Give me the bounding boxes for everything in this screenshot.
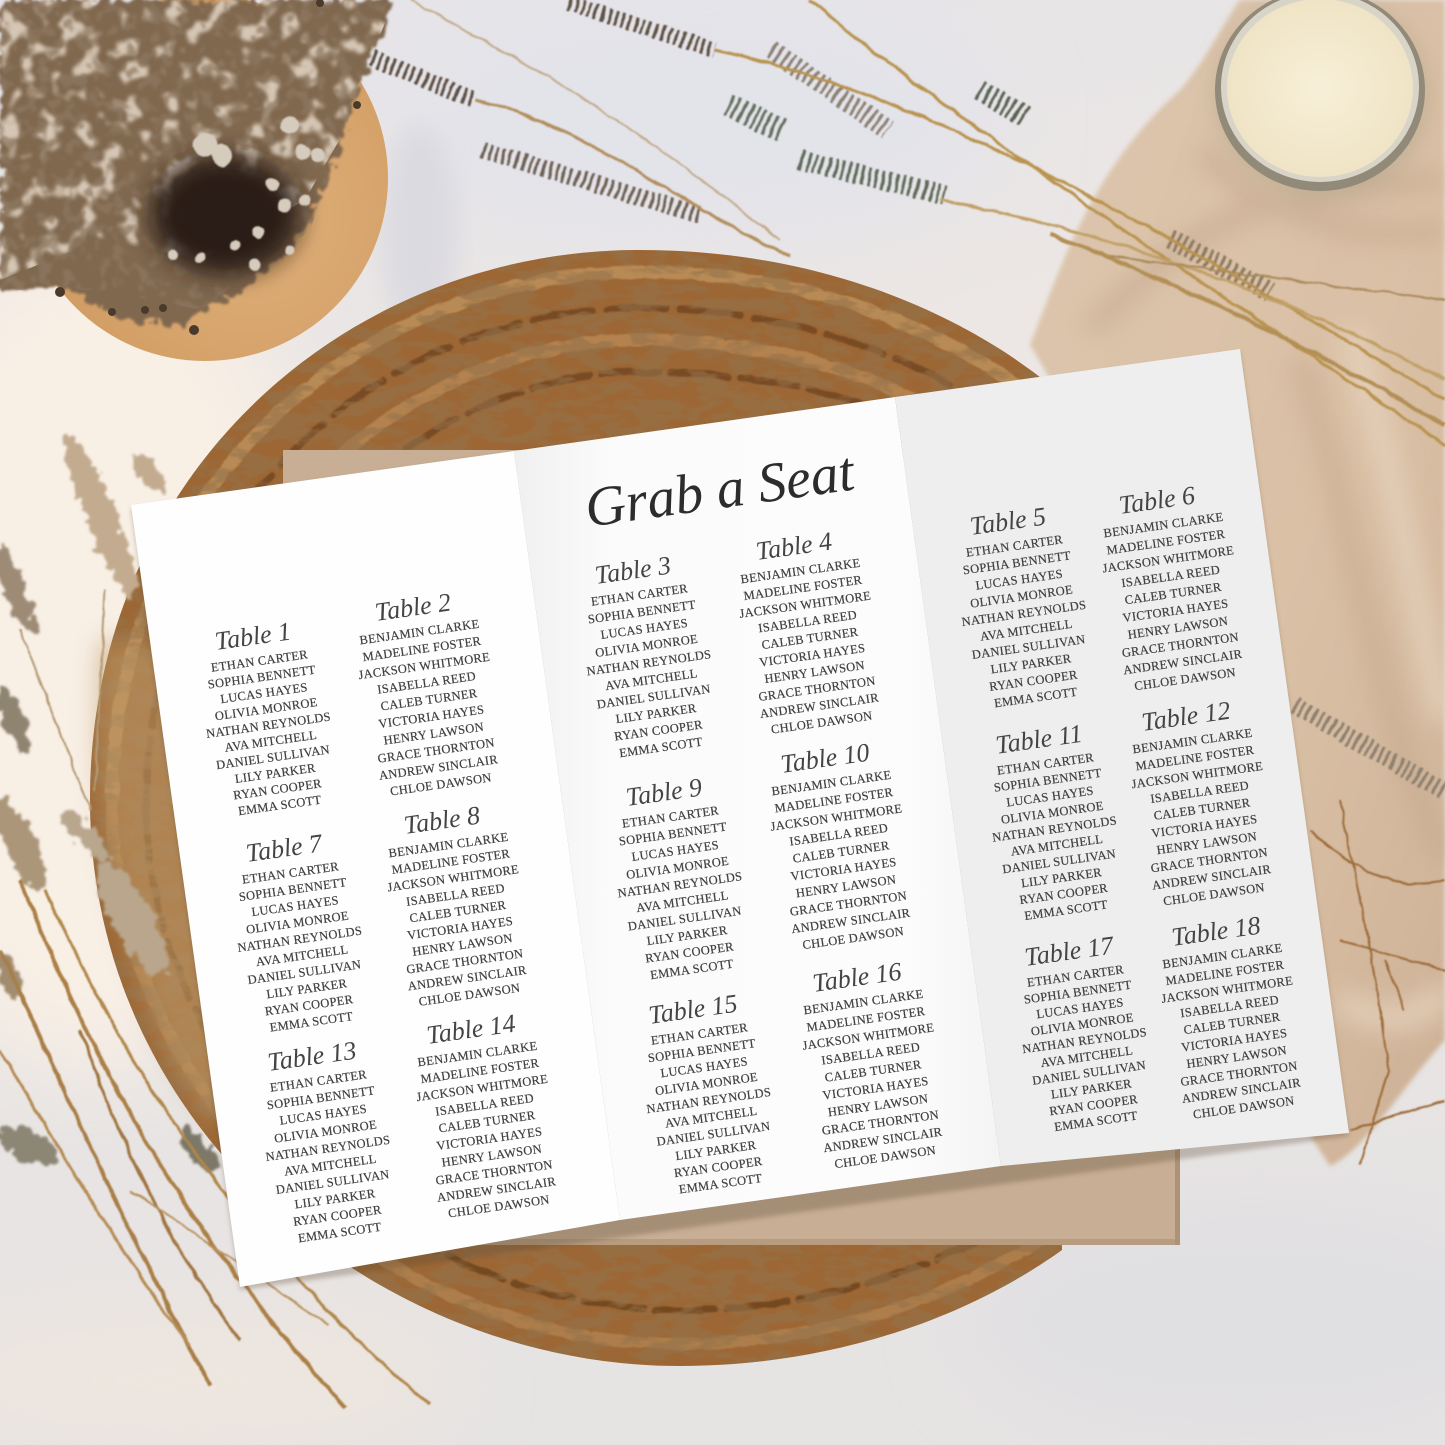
table 8 <box>377 796 536 1011</box>
table 11: OLIVIA MONROE <box>1000 799 1105 827</box>
table 15: LUCAS HAYES <box>660 1054 749 1080</box>
table 15: SOPHIA BENNETT <box>647 1036 757 1065</box>
table 1: OLIVIA MONROE <box>214 695 319 723</box>
table 4: ANDREW SINCLAIR <box>759 690 880 721</box>
table 5: ETHAN CARTER <box>965 532 1064 560</box>
table 8: MADELINE FOSTER <box>391 846 511 877</box>
table 9: ETHAN CARTER <box>621 803 720 831</box>
table 11 <box>978 716 1129 926</box>
table 13: DANIEL SULLIVAN <box>275 1167 390 1197</box>
table 10: CHLOE DAWSON <box>802 924 905 952</box>
table 7: RYAN COOPER <box>264 992 354 1018</box>
table 18: JACKSON WHITMORE <box>1160 974 1294 1006</box>
table 17: ETHAN CARTER <box>1026 962 1125 990</box>
table 6: ANDREW SINCLAIR <box>1122 647 1243 677</box>
table 8: GRACE THORNTON <box>405 946 524 977</box>
table 7: AVA MITCHELL <box>255 942 349 969</box>
table 1: EMMA SCOTT <box>237 793 322 818</box>
table 5: Table 5 <box>968 502 1048 541</box>
table 2: Table 2 <box>373 588 453 627</box>
table 3: RYAN COOPER <box>613 717 704 744</box>
table 15: Table 15 <box>647 989 739 1030</box>
table 4: Table 4 <box>754 527 834 566</box>
table 1 <box>192 613 343 821</box>
panel: left fold <box>131 451 620 1287</box>
table 16: BENJAMIN CLARKE <box>803 987 924 1017</box>
table 3 <box>572 547 724 763</box>
wheat stems top <box>372 0 1445 792</box>
table 2: ISABELLA REED <box>376 669 477 697</box>
table 2: JACKSON WHITMORE <box>358 650 491 682</box>
table 5: SOPHIA BENNETT <box>962 548 1072 577</box>
table 11: LUCAS HAYES <box>1005 783 1095 810</box>
table 7: DANIEL SULLIVAN <box>247 957 362 987</box>
table 5: EMMA SCOTT <box>993 685 1078 710</box>
table 10 <box>760 734 920 954</box>
table 2 <box>348 583 508 801</box>
table 13: Table 13 <box>266 1036 358 1077</box>
table 6: HENRY LAWSON <box>1127 614 1229 642</box>
table 1: ETHAN CARTER <box>210 647 309 675</box>
table 17: Table 17 <box>1023 930 1116 972</box>
table 18: MADELINE FOSTER <box>1165 958 1285 988</box>
table 14: CALEB TURNER <box>438 1108 537 1135</box>
table 6: VICTORIA HAYES <box>1122 596 1229 625</box>
wheat stems left <box>0 428 430 1408</box>
table 6: Table 6 <box>1117 481 1197 520</box>
table 5: OLIVIA MONROE <box>969 582 1074 611</box>
fabric napkin <box>1030 0 1445 1166</box>
table 14: MADELINE FOSTER <box>420 1056 540 1086</box>
table 1: LUCAS HAYES <box>219 680 308 706</box>
table 16: HENRY LAWSON <box>827 1091 929 1119</box>
table 18 <box>1151 907 1310 1124</box>
fluffy seed heads <box>0 428 225 1177</box>
table 10: ANDREW SINCLAIR <box>790 906 912 936</box>
table 13: ETHAN CARTER <box>269 1067 368 1095</box>
table 5: AVA MITCHELL <box>979 617 1073 644</box>
table 18: Table 18 <box>1170 911 1262 952</box>
table 7: Table 7 <box>244 828 325 868</box>
table 12: GRACE THORNTON <box>1150 845 1269 875</box>
table 4: CALEB TURNER <box>761 625 859 652</box>
table 11: AVA MITCHELL <box>1010 832 1104 859</box>
table 17: LUCAS HAYES <box>1035 995 1124 1021</box>
table 8: HENRY LAWSON <box>411 931 514 959</box>
table 17 <box>1008 928 1159 1137</box>
table 7: ETHAN CARTER <box>241 859 340 887</box>
table 14: Table 14 <box>425 1009 517 1050</box>
table 3: OLIVIA MONROE <box>594 632 699 660</box>
table 9: RYAN COOPER <box>644 939 735 966</box>
table 11: EMMA SCOTT <box>1023 897 1109 923</box>
table 5: NATHAN REYNOLDS <box>961 598 1087 629</box>
table 7 <box>223 825 375 1038</box>
table 16: GRACE THORNTON <box>821 1108 940 1138</box>
table 17: SOPHIA BENNETT <box>1023 978 1133 1007</box>
table 15: OLIVIA MONROE <box>654 1070 759 1098</box>
table 8: CALEB TURNER <box>409 898 507 925</box>
table 11: NATHAN REYNOLDS <box>991 813 1118 845</box>
table 3: EMMA SCOTT <box>618 735 703 760</box>
table 4: ISABELLA REED <box>757 608 858 635</box>
table 9 <box>603 769 755 985</box>
table 5: RYAN COOPER <box>988 668 1079 694</box>
table 7: EMMA SCOTT <box>269 1009 354 1035</box>
table 16: CHLOE DAWSON <box>834 1143 937 1171</box>
woven placemat <box>90 250 1062 1366</box>
table 6: ISABELLA REED <box>1120 563 1221 590</box>
table 12: MADELINE FOSTER <box>1135 743 1255 773</box>
table 9: DANIEL SULLIVAN <box>627 904 742 934</box>
table 4: VICTORIA HAYES <box>758 641 866 670</box>
table 1: RYAN COOPER <box>232 776 323 803</box>
panel: centre fold <box>514 397 1001 1220</box>
table 14: BENJAMIN CLARKE <box>417 1039 538 1069</box>
table 8: BENJAMIN CLARKE <box>388 830 509 860</box>
table 12: ISABELLA REED <box>1149 778 1250 806</box>
table 10: Table 10 <box>779 738 871 779</box>
table 11: SOPHIA BENNETT <box>993 766 1103 795</box>
table 5 <box>947 498 1099 713</box>
table 12: Table 12 <box>1140 696 1232 737</box>
twigs right <box>1310 800 1445 1165</box>
table 2: ANDREW SINCLAIR <box>378 752 499 783</box>
table 18: BENJAMIN CLARKE <box>1162 941 1283 971</box>
table 18: VICTORIA HAYES <box>1180 1026 1288 1055</box>
table 10: GRACE THORNTON <box>789 889 908 919</box>
dried flower bouquet <box>0 0 395 335</box>
table 6: MADELINE FOSTER <box>1106 527 1226 557</box>
table 1: AVA MITCHELL <box>224 728 318 755</box>
table 6: CALEB TURNER <box>1124 580 1223 607</box>
table 3: DANIEL SULLIVAN <box>596 682 711 712</box>
table 16: ANDREW SINCLAIR <box>822 1125 944 1155</box>
table 15: DANIEL SULLIVAN <box>656 1119 771 1149</box>
table 8: ISABELLA REED <box>405 881 506 909</box>
table 18: CHLOE DAWSON <box>1192 1094 1295 1122</box>
table 8: JACKSON WHITMORE <box>386 862 520 894</box>
table 10: BENJAMIN CLARKE <box>771 768 892 798</box>
table 13: RYAN COOPER <box>292 1203 383 1229</box>
table 1: SOPHIA BENNETT <box>207 663 317 692</box>
table 15 <box>632 986 784 1199</box>
table 6: BENJAMIN CLARKE <box>1103 510 1224 540</box>
table 3: Table 3 <box>593 551 673 590</box>
table 2: CALEB TURNER <box>380 686 479 713</box>
panel: right fold <box>895 349 1349 1166</box>
table 12: ANDREW SINCLAIR <box>1151 862 1272 893</box>
table 10: JACKSON WHITMORE <box>770 801 903 834</box>
table 7: OLIVIA MONROE <box>245 909 350 937</box>
table 13: EMMA SCOTT <box>297 1220 382 1245</box>
paper shadow <box>131 352 1349 1290</box>
table 15: NATHAN REYNOLDS <box>646 1085 772 1116</box>
table 8: ANDREW SINCLAIR <box>407 963 528 993</box>
table 10: CALEB TURNER <box>792 838 891 866</box>
table 14: JACKSON WHITMORE <box>416 1072 549 1104</box>
table 14: VICTORIA HAYES <box>436 1124 543 1153</box>
table 11: RYAN COOPER <box>1019 881 1109 907</box>
table 13: NATHAN REYNOLDS <box>265 1133 391 1164</box>
table 18: CALEB TURNER <box>1183 1010 1281 1037</box>
table 10: ISABELLA REED <box>789 821 889 849</box>
table 16: Table 16 <box>811 957 903 998</box>
table 18: HENRY LAWSON <box>1186 1043 1288 1071</box>
table 14: CHLOE DAWSON <box>447 1192 550 1220</box>
table 2: HENRY LAWSON <box>383 720 485 748</box>
seating chart paper <box>131 349 1349 1287</box>
table 9: Table 9 <box>624 773 704 812</box>
table 4: MADELINE FOSTER <box>743 573 863 603</box>
table 2: BENJAMIN CLARKE <box>359 617 480 647</box>
table 3: AVA MITCHELL <box>604 666 698 693</box>
table 4 <box>729 522 888 739</box>
table 13: AVA MITCHELL <box>283 1152 377 1179</box>
table 2: VICTORIA HAYES <box>378 702 485 731</box>
table 2: GRACE THORNTON <box>377 735 495 766</box>
table 16: ISABELLA REED <box>821 1040 921 1068</box>
table 7: LUCAS HAYES <box>251 893 340 919</box>
candle jar <box>1215 0 1428 196</box>
table 14 <box>406 1005 566 1223</box>
table 4: JACKSON WHITMORE <box>738 589 872 621</box>
table 15: RYAN COOPER <box>673 1154 764 1180</box>
table 15: AVA MITCHELL <box>664 1104 758 1131</box>
table 4: BENJAMIN CLARKE <box>740 556 861 586</box>
table 5: LILY PARKER <box>990 651 1073 676</box>
table 10: HENRY LAWSON <box>795 872 897 900</box>
table 14: HENRY LAWSON <box>441 1142 543 1170</box>
table 11: ETHAN CARTER <box>996 750 1095 778</box>
table 6: JACKSON WHITMORE <box>1102 543 1235 575</box>
table 15: ETHAN CARTER <box>650 1020 749 1048</box>
vase <box>22 0 388 361</box>
table 6 <box>1092 476 1252 695</box>
table 17: DANIEL SULLIVAN <box>1031 1058 1147 1088</box>
table 1: NATHAN REYNOLDS <box>205 710 332 741</box>
table 13: LUCAS HAYES <box>279 1102 368 1128</box>
table 1: Table 1 <box>213 617 293 656</box>
book under the seating chart <box>283 450 1180 1245</box>
table 9: EMMA SCOTT <box>649 957 734 982</box>
table 17: RYAN COOPER <box>1049 1092 1139 1118</box>
table 13 <box>251 1033 403 1248</box>
table 14: GRACE THORNTON <box>435 1157 553 1188</box>
table 16 <box>792 953 952 1173</box>
table 9: NATHAN REYNOLDS <box>617 869 743 900</box>
table 3: ETHAN CARTER <box>590 581 689 609</box>
table 7: NATHAN REYNOLDS <box>237 924 363 955</box>
table 1: LILY PARKER <box>234 761 317 786</box>
table 18: ISABELLA REED <box>1179 993 1280 1020</box>
table 13: LILY PARKER <box>294 1186 377 1211</box>
table 14: ISABELLA REED <box>434 1091 535 1119</box>
table 12: BENJAMIN CLARKE <box>1132 726 1253 756</box>
table 8: VICTORIA HAYES <box>406 914 514 943</box>
table 11: LILY PARKER <box>1020 865 1103 890</box>
table 8: CHLOE DAWSON <box>418 981 521 1009</box>
table 12: JACKSON WHITMORE <box>1131 759 1264 791</box>
table 4: GRACE THORNTON <box>758 674 876 704</box>
table 16: JACKSON WHITMORE <box>802 1020 935 1053</box>
table 14: ANDREW SINCLAIR <box>436 1174 557 1205</box>
table 17: EMMA SCOTT <box>1053 1109 1138 1134</box>
table 17: NATHAN REYNOLDS <box>1021 1025 1148 1056</box>
table 4: HENRY LAWSON <box>764 658 866 686</box>
table 9: AVA MITCHELL <box>635 888 729 915</box>
table 10: MADELINE FOSTER <box>774 785 894 816</box>
table 12: VICTORIA HAYES <box>1151 812 1258 841</box>
table 16: VICTORIA HAYES <box>822 1074 929 1103</box>
table 13: OLIVIA MONROE <box>273 1117 378 1146</box>
table 7: SOPHIA BENNETT <box>238 875 348 904</box>
table 17: AVA MITCHELL <box>1040 1043 1134 1070</box>
table 6: GRACE THORNTON <box>1121 630 1240 660</box>
sprig heads <box>372 3 1445 792</box>
table 9: OLIVIA MONROE <box>625 854 730 882</box>
table 17: OLIVIA MONROE <box>1030 1010 1135 1039</box>
table 9: SOPHIA BENNETT <box>618 819 728 848</box>
table 16: MADELINE FOSTER <box>806 1004 926 1035</box>
table 13: SOPHIA BENNETT <box>266 1083 376 1112</box>
table 2: CHLOE DAWSON <box>389 770 492 798</box>
table 9: LUCAS HAYES <box>631 838 720 864</box>
table 3: LUCAS HAYES <box>600 616 689 642</box>
table 1: DANIEL SULLIVAN <box>215 742 331 772</box>
table 10: VICTORIA HAYES <box>790 855 897 884</box>
table 12 <box>1121 692 1281 910</box>
table 15: LILY PARKER <box>675 1138 757 1163</box>
table 11: Table 11 <box>994 719 1084 760</box>
table 11: DANIEL SULLIVAN <box>1001 847 1117 876</box>
table 12: CHLOE DAWSON <box>1162 880 1266 908</box>
table 6: CHLOE DAWSON <box>1134 665 1237 693</box>
title: Grab a Seat <box>581 440 859 540</box>
table 18: GRACE THORNTON <box>1180 1059 1298 1089</box>
table 8: Table 8 <box>402 801 482 840</box>
table 5: LUCAS HAYES <box>975 567 1064 593</box>
table 4: CHLOE DAWSON <box>770 709 873 737</box>
table 3: NATHAN REYNOLDS <box>586 647 712 678</box>
table 12: CALEB TURNER <box>1153 795 1252 823</box>
table 16: CALEB TURNER <box>824 1057 923 1085</box>
table 7: LILY PARKER <box>265 976 348 1001</box>
table 18: ANDREW SINCLAIR <box>1181 1075 1302 1106</box>
table 3: SOPHIA BENNETT <box>587 597 697 626</box>
table 2: MADELINE FOSTER <box>362 634 482 664</box>
table 15: EMMA SCOTT <box>678 1171 763 1197</box>
table 5: DANIEL SULLIVAN <box>971 632 1086 662</box>
table 3: LILY PARKER <box>615 701 698 726</box>
table 17: LILY PARKER <box>1050 1076 1133 1102</box>
table 9: LILY PARKER <box>646 923 729 948</box>
table 12: HENRY LAWSON <box>1156 829 1258 857</box>
